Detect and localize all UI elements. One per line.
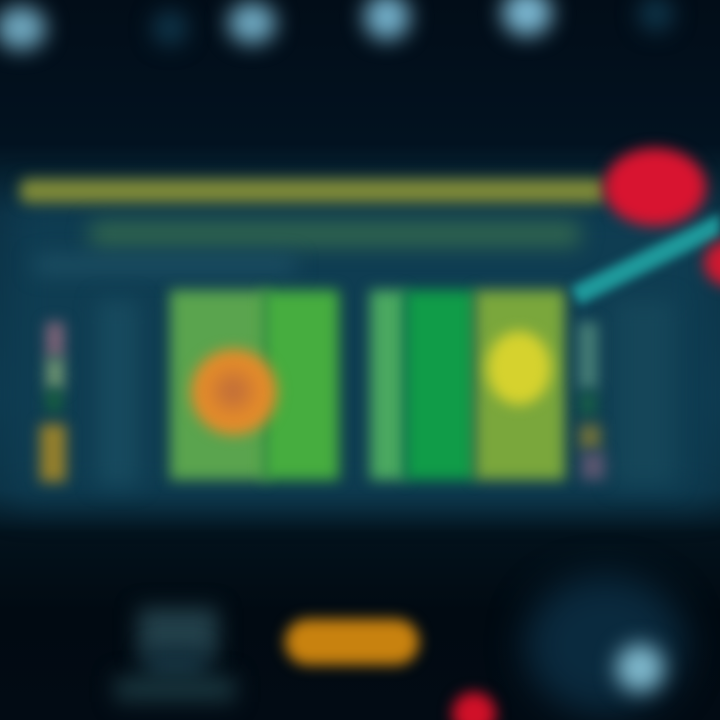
- right legend column: [571, 314, 665, 488]
- dial highlight: [616, 644, 664, 692]
- subtitle bar: [90, 222, 580, 246]
- red dot bottom: [452, 692, 496, 720]
- red blob top right: [604, 148, 706, 226]
- main panel: [10, 200, 710, 500]
- lower left device: [108, 598, 242, 710]
- yellow circle: [487, 331, 551, 405]
- red blob right edge: [704, 240, 720, 286]
- title bar: [20, 179, 605, 203]
- left legend column: [30, 306, 135, 492]
- dial circle: [525, 575, 685, 715]
- orange circle: [191, 349, 277, 435]
- column header bar: [35, 258, 295, 272]
- green chart block left: [160, 280, 348, 490]
- top row of glowing lights: [0, 0, 680, 65]
- orange pill: [285, 619, 419, 665]
- green chart block right: [360, 280, 574, 490]
